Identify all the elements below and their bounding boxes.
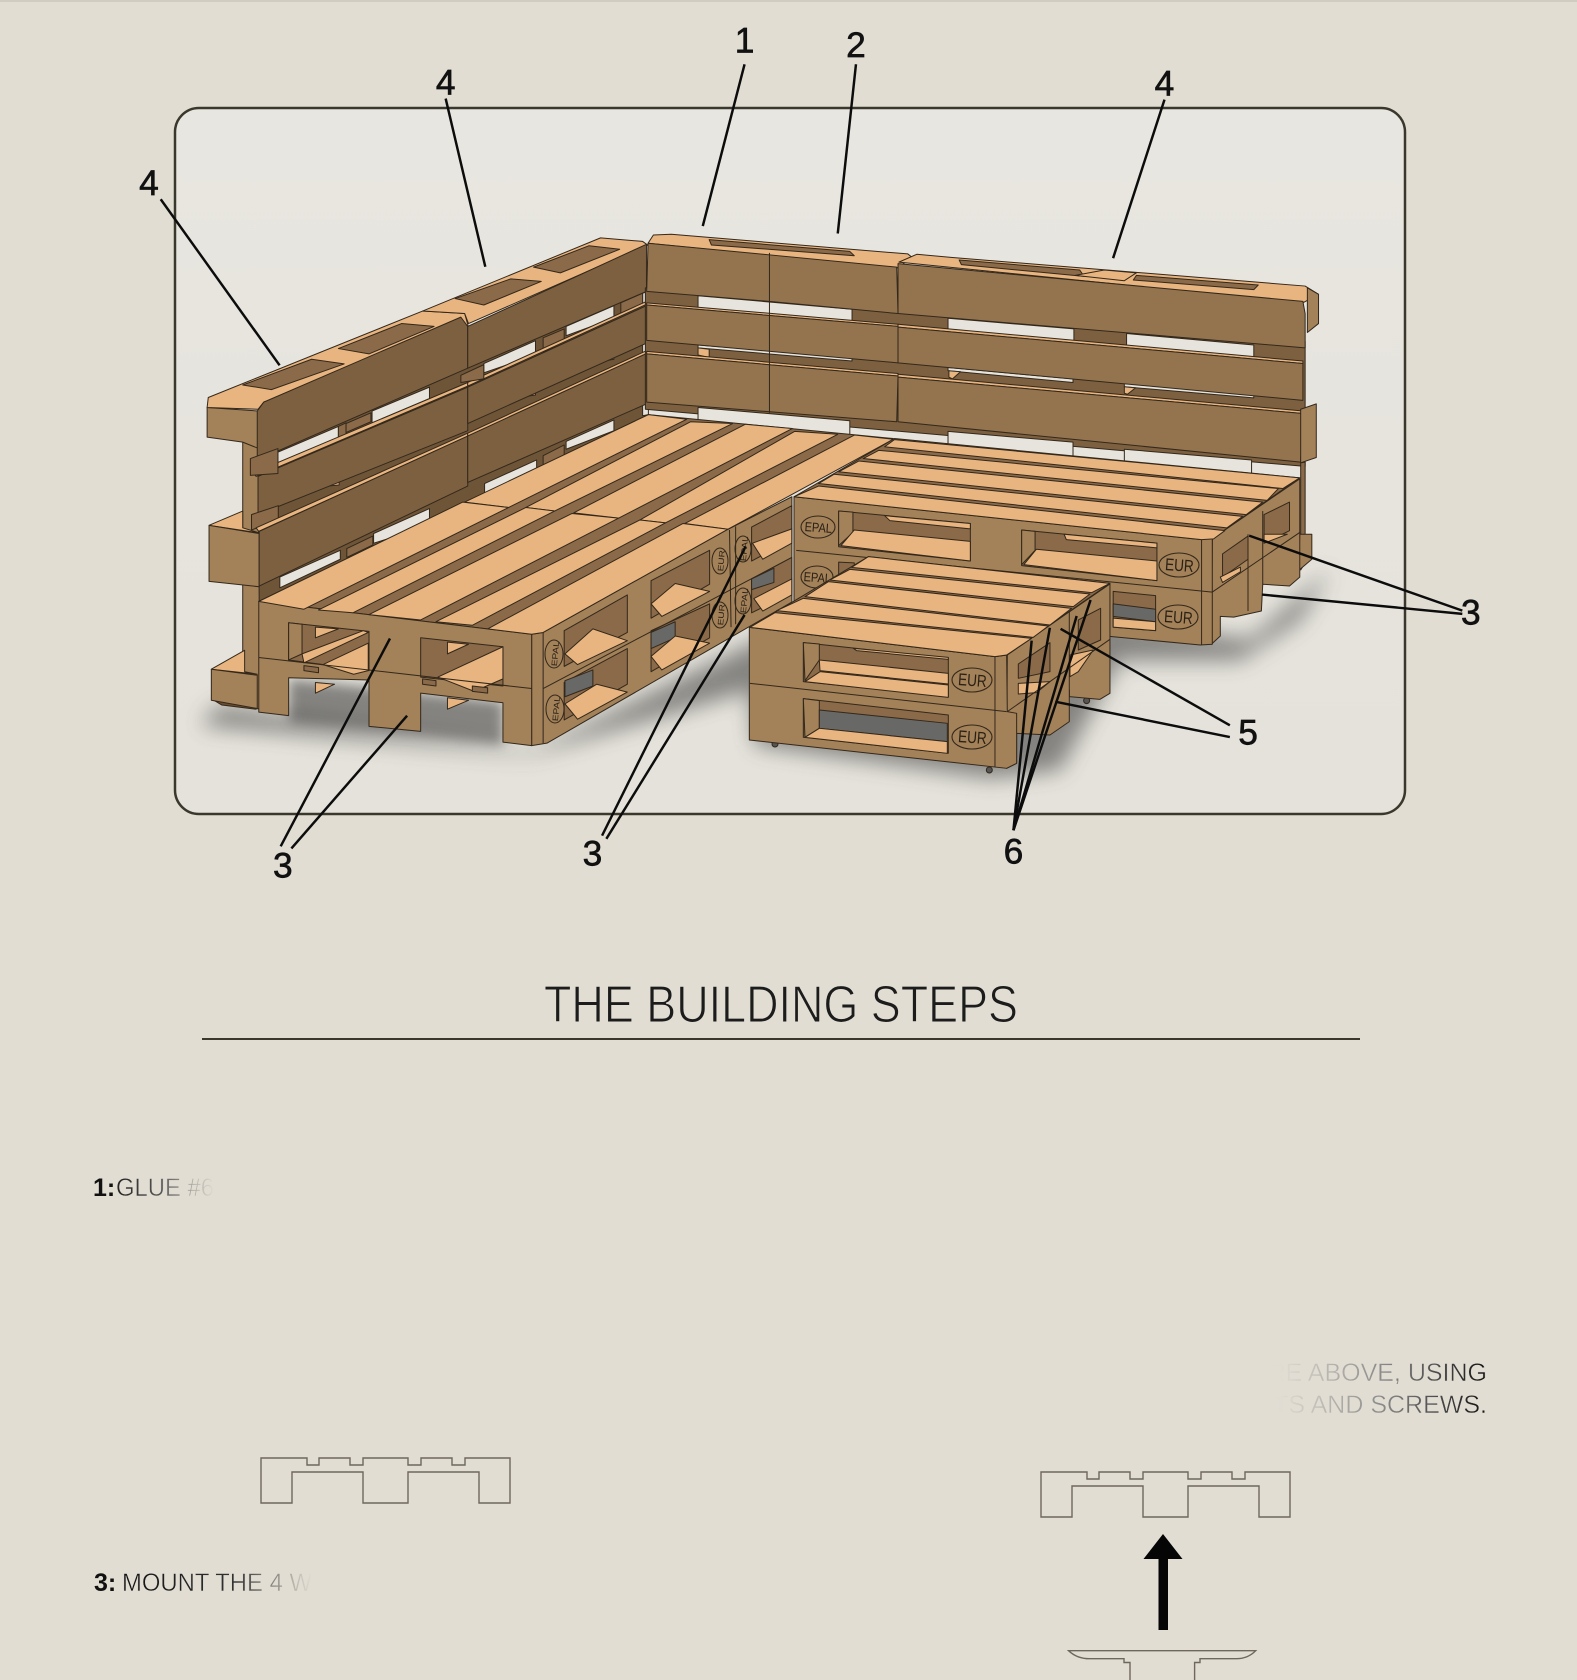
EUR stamps on table: EUR <box>957 671 987 691</box>
pallet profile left <box>261 1458 510 1503</box>
end face of sofa <box>259 601 532 746</box>
wall boards <box>250 244 646 586</box>
table casters <box>772 698 1090 773</box>
side windows of rear left pallet <box>752 506 792 613</box>
table top boards <box>750 557 1110 657</box>
EUR and EPAL stamps on left sofa <box>545 536 751 723</box>
EUR and EPAL stamps on left sofa: EPAL <box>551 696 562 722</box>
EUR and EPAL stamps on right sofa: EUR <box>1163 608 1193 628</box>
EUR and EPAL stamps on right sofa: EUR <box>1164 556 1194 576</box>
coffee table <box>749 557 1110 773</box>
left wall of pallets <box>207 238 648 709</box>
leader lines <box>161 64 1462 848</box>
EUR stamps on table <box>952 668 992 749</box>
back wall gaps <box>698 296 1254 474</box>
wall top edge <box>207 238 648 409</box>
EUR and EPAL stamps on right sofa: EPAL <box>804 519 833 536</box>
EUR and EPAL stamps on left sofa: EPAL <box>739 588 750 614</box>
part numbers: 3 <box>583 835 602 874</box>
back wall of pallets <box>645 234 1319 570</box>
part numbers: 1 <box>735 21 754 60</box>
wall gaps <box>278 291 648 588</box>
pallet profile right <box>1041 1472 1290 1517</box>
EUR and EPAL stamps on left sofa: EUR <box>716 549 727 572</box>
step 3 text: 3: <box>94 1569 116 1597</box>
EUR and EPAL stamps on right sofa <box>801 516 1199 629</box>
table side face <box>1007 584 1110 768</box>
part numbers: 3 <box>1461 594 1481 633</box>
EUR and EPAL stamps on right sofa: EPAL <box>803 569 832 586</box>
step 2 text fragment: RE ABOVE, USING <box>1267 1359 1487 1387</box>
right end of sofa <box>1211 479 1312 644</box>
image panel frame <box>175 108 1405 814</box>
left sofa section <box>259 415 893 746</box>
part numbers <box>139 21 1481 885</box>
right sofa section <box>794 439 1312 645</box>
part numbers: 4 <box>1155 64 1174 103</box>
EUR and EPAL stamps on left sofa: EPAL <box>550 641 561 667</box>
section heading: THE BUILDING STEPS <box>544 976 1018 1034</box>
long front face <box>794 497 1212 645</box>
step 2 text fragment <box>1267 1359 1487 1419</box>
step 1 text: 1: <box>93 1174 115 1202</box>
part numbers: 3 <box>273 846 293 885</box>
part numbers: 2 <box>846 26 866 65</box>
seat boards <box>794 439 1300 540</box>
floor shadows <box>200 570 1330 778</box>
part numbers: 5 <box>1238 714 1258 753</box>
table front face <box>749 627 1017 768</box>
EUR and EPAL stamps on left sofa: EPAL <box>739 536 750 562</box>
wheel or foot profile <box>1069 1651 1256 1680</box>
leader lines and part numbers <box>139 21 1481 885</box>
wall end blocks <box>207 407 260 709</box>
back wall boards <box>647 234 1319 570</box>
EUR stamps on table: EUR <box>957 728 987 748</box>
step 3 text: MOUNT THE 4 W <box>122 1569 312 1597</box>
arrow up <box>1144 1534 1182 1630</box>
seat boards <box>259 415 893 634</box>
long side of sofa <box>532 497 792 746</box>
part numbers: 4 <box>436 63 455 102</box>
EUR and EPAL stamps on left sofa: EUR <box>716 603 727 626</box>
part numbers: 6 <box>1004 832 1023 871</box>
part numbers: 4 <box>139 164 159 203</box>
step 1 text: GLUE #6 <box>116 1174 214 1202</box>
seat under-layer <box>259 415 893 634</box>
step 2 text fragment: TS AND SCREWS. <box>1273 1391 1487 1419</box>
